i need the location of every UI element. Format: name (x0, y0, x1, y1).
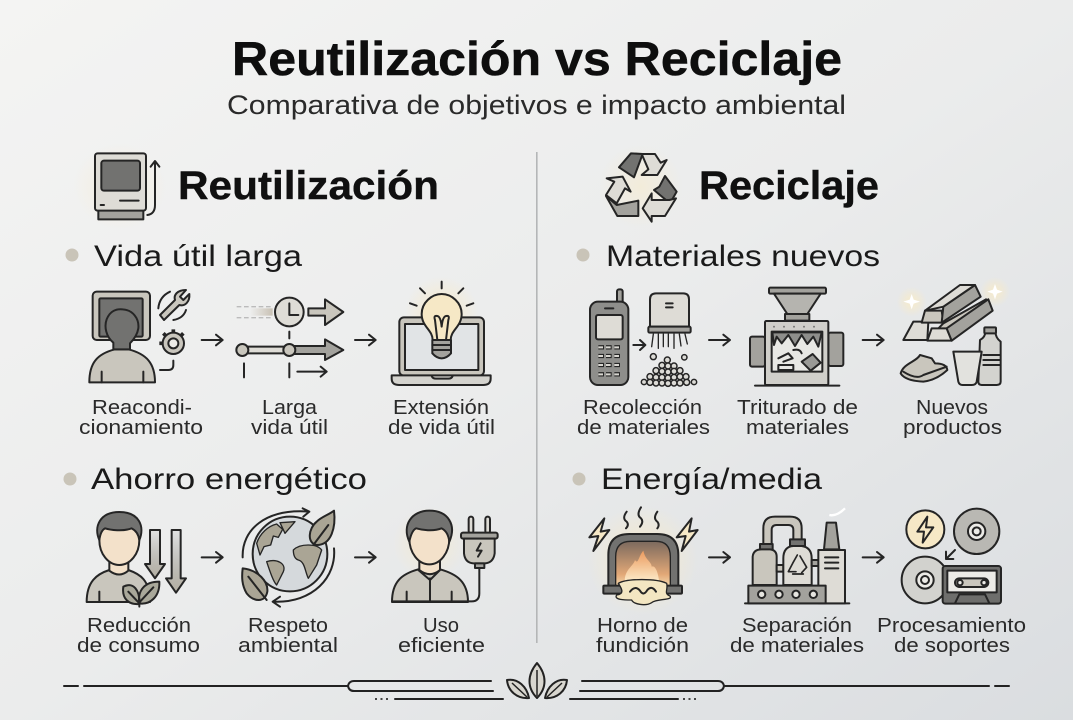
bullet (576, 248, 590, 262)
label: fundición (596, 635, 689, 657)
subheading: Ahorro energético: Ahorro energético (91, 463, 367, 496)
label: de materiales (577, 417, 710, 439)
label: Respeto (248, 615, 328, 637)
label: Reducción (87, 615, 191, 637)
icon: energy and media (902, 509, 1001, 604)
label: de vida útil (388, 417, 495, 439)
label: Horno de (597, 615, 688, 637)
icon: crusher machine (750, 288, 843, 386)
label: Nuevos (916, 397, 988, 419)
panel: Reciclaje (572, 145, 1026, 657)
icon: new products (897, 277, 1010, 385)
label: productos (903, 417, 1002, 439)
label: de soportes (894, 635, 1010, 657)
icon: separation plant (745, 508, 849, 603)
subheading: Energía/media: Energía/media (601, 463, 822, 496)
footer ornament (64, 663, 1009, 699)
icon: old computer with arrow (73, 143, 167, 230)
panel: Reutilización (64, 143, 498, 657)
label: de consumo (77, 635, 200, 657)
column divider (536, 152, 538, 643)
icon: globe with leaves (242, 508, 334, 607)
bullet (66, 248, 78, 262)
icon: person reducing consumption (87, 512, 186, 607)
bullet (572, 472, 586, 486)
arrow (202, 335, 223, 345)
arrow (709, 335, 730, 345)
heading: Reciclaje: Reciclaje (699, 164, 879, 208)
subheading: Vida útil larga: Vida útil larga (94, 240, 302, 273)
icon: smelting furnace (588, 505, 698, 615)
subheading: Materiales nuevos: Materiales nuevos (606, 240, 880, 273)
title: Reutilización vs Reciclaje (232, 32, 842, 85)
label: ambiental (238, 635, 338, 657)
arrow (355, 335, 376, 345)
label: Uso (423, 615, 459, 637)
heading: Reutilización: Reutilización (178, 164, 439, 208)
label: Separación (742, 615, 852, 637)
arrow (709, 552, 730, 563)
arrow (863, 552, 884, 563)
icon: refurbishing person (89, 290, 189, 382)
icon: recycling symbol (599, 145, 682, 228)
label: Procesamiento (877, 615, 1026, 637)
label: Larga (262, 397, 318, 419)
label: eficiente (398, 635, 485, 657)
icon: laptop with lightbulb (392, 277, 491, 385)
icon: long useful life timeline (236, 298, 343, 377)
label: materiales (746, 417, 849, 439)
arrow (863, 335, 884, 345)
label: Reacondi- (92, 397, 192, 419)
label: Extensión (393, 397, 489, 419)
label: Recolección (583, 397, 702, 419)
icon: person with plug (392, 507, 498, 602)
subtitle: Comparativa de objetivos e impacto ambiental (227, 90, 846, 120)
label: de materiales (730, 635, 864, 657)
arrow (202, 552, 223, 563)
icon: old phone and shredder (590, 289, 697, 386)
label: cionamiento (79, 417, 203, 439)
label: vida útil (251, 417, 328, 439)
label: Triturado de (737, 397, 858, 419)
bullet (64, 472, 76, 486)
arrow (355, 552, 376, 563)
